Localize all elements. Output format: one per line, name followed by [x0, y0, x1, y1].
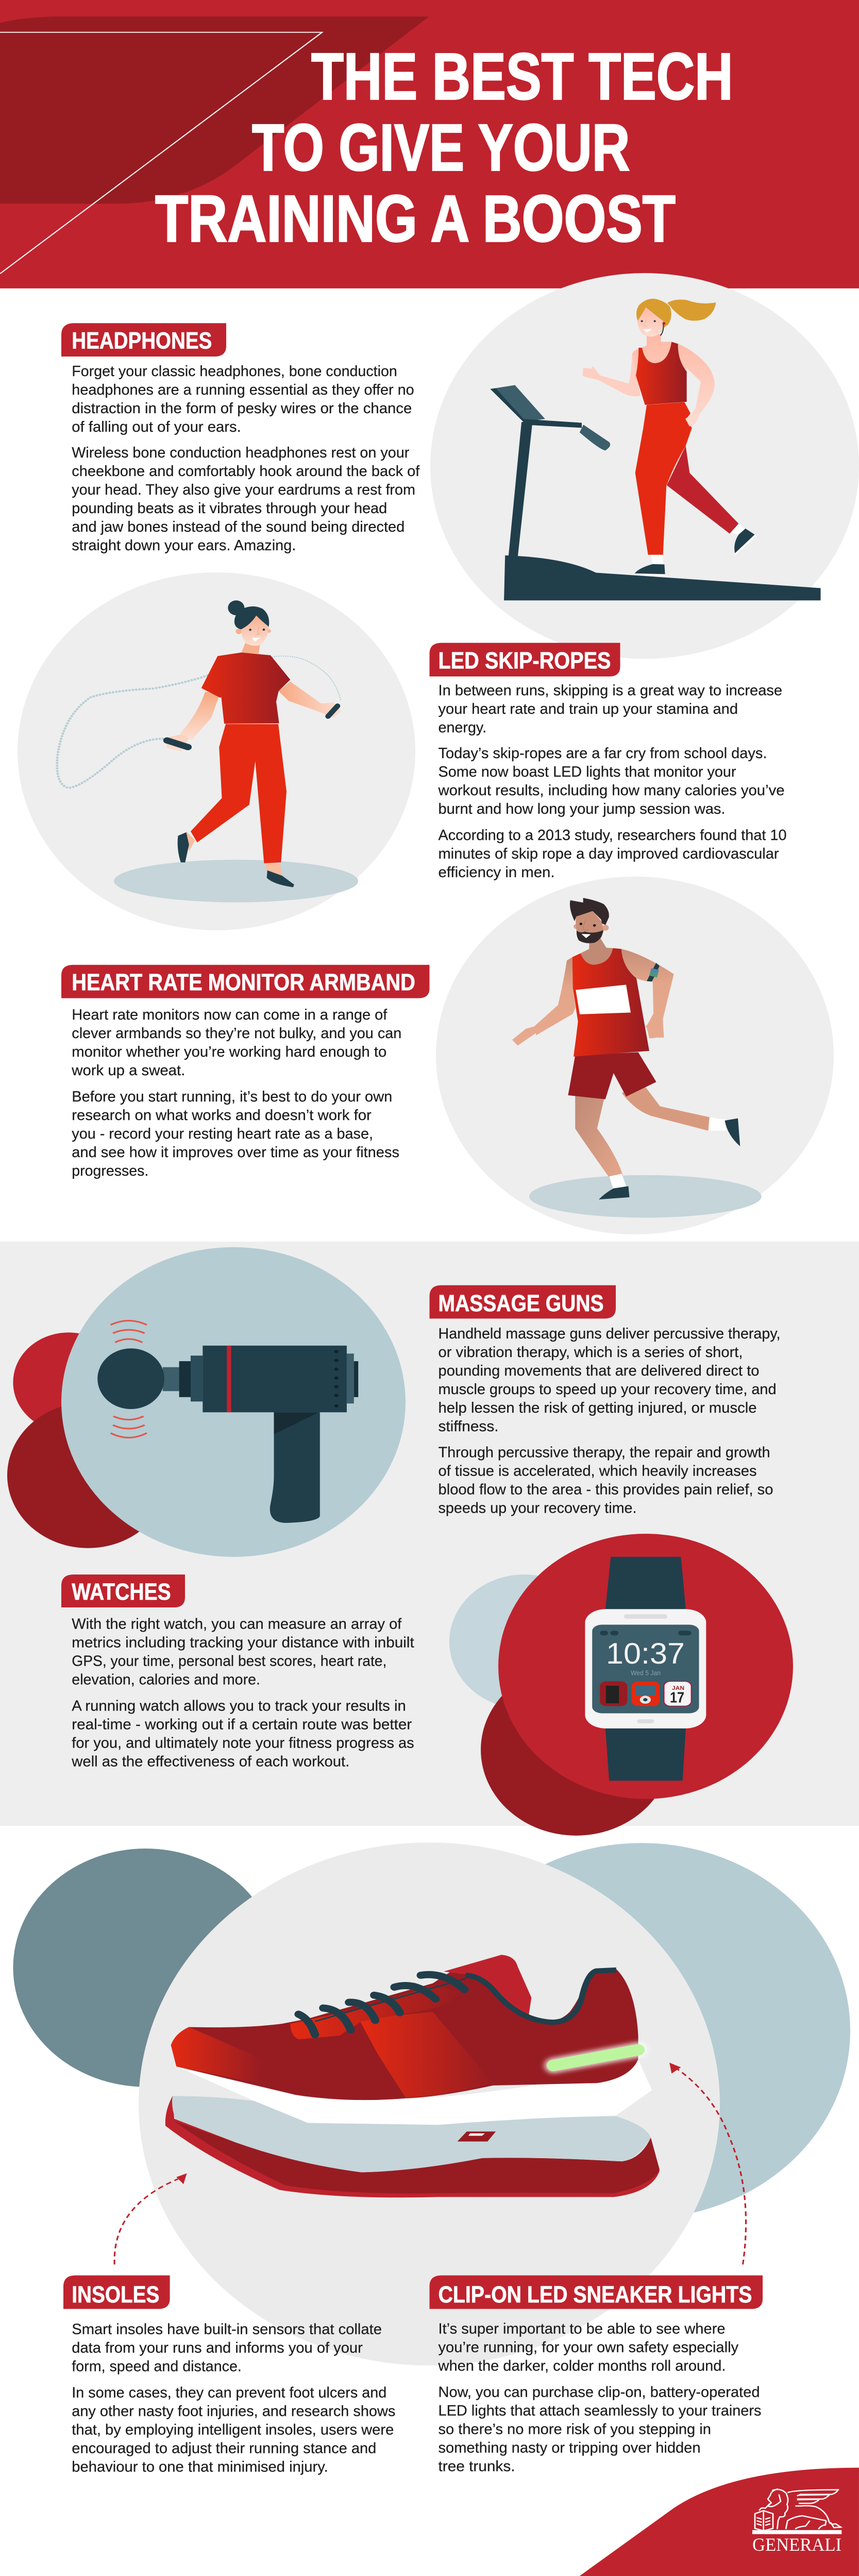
- text: skip-ropes body: burnt and how long your jump session was.: [438, 801, 726, 817]
- text: insoles body: form, speed and distance.: [72, 2359, 242, 2375]
- text: watches body: well as the effectiveness of each workout.: [71, 1754, 349, 1770]
- text: armband body: progresses.: [72, 1163, 148, 1179]
- heading: headphones: [61, 323, 226, 357]
- title: TRAINING A BOOST: [155, 182, 676, 256]
- panel: watches: [61, 1534, 793, 1836]
- text: clip-on lights body: you’re running, for your own safety especially: [438, 2340, 738, 2355]
- illustration: sneaker and insole: [13, 1842, 850, 2365]
- text: headphones body: and jaw bones instead of the sound being directed: [72, 519, 405, 535]
- arrow to LED light: [669, 2063, 746, 2264]
- text: massage guns body: of tissue is accelerated, which heavily increases: [438, 1463, 756, 1479]
- text: skip-ropes body: your heart rate and train up your stamina and: [438, 701, 738, 717]
- text: armband body: [71, 1007, 401, 1179]
- text: massage guns body: Handheld massage guns deliver percussive therapy,: [438, 1326, 781, 1342]
- text: headphones body: headphones are a running essential as they offer no: [72, 382, 414, 398]
- text: armband body: monitor whether you’re working hard enough to: [72, 1044, 386, 1060]
- heading: clip-on LED sneaker lights: CLIP-ON LED SNEAKER LIGHTS: [438, 2282, 752, 2308]
- text: armband body: you - record your resting heart rate as a base,: [72, 1126, 373, 1142]
- text: massage guns body: or vibration therapy, which is a series of short,: [438, 1344, 743, 1361]
- illustration: woman skipping: [18, 572, 415, 930]
- text: headphones body: Wireless bone conduction headphones rest on your: [72, 445, 409, 461]
- text: massage guns body: blood flow to the area - this provides pain relief, so: [438, 1482, 773, 1498]
- text: armband body: Heart rate monitors now can come in a range of: [72, 1007, 388, 1023]
- text: massage guns body: stiffness.: [438, 1418, 499, 1435]
- text: massage guns body: Through percussive therapy, the repair and growth: [438, 1445, 770, 1461]
- heading: LED skip-ropes: [430, 643, 620, 676]
- text: watches body: [71, 1616, 414, 1770]
- text: armband body: research on what works and doesn’t work for: [72, 1108, 372, 1124]
- text: skip-ropes body: In between runs, skipping is a great way to increase: [438, 683, 782, 699]
- illustration: massage gun: [7, 1247, 406, 1557]
- panel: LED skip-ropes: [18, 572, 786, 930]
- text: skip-ropes body: Today’s skip-ropes are a far cry from school days.: [438, 745, 767, 761]
- text: clip-on lights body: Now, you can purchase clip-on, battery-operated: [438, 2384, 760, 2400]
- text: clip-on lights body: tree trunks.: [438, 2459, 515, 2475]
- grey background band: [0, 1242, 859, 1826]
- calendar month label: JAN: [672, 1686, 684, 1691]
- text: insoles body: Smart insoles have built-in sensors that collate: [72, 2321, 382, 2337]
- watch time label: 10:37: [606, 1637, 685, 1670]
- text: watches body: GPS, your time, personal best scores, heart rate,: [72, 1653, 386, 1669]
- heading: heart rate monitor armband: [61, 965, 430, 998]
- text: headphones body: cheekbone and comfortably hook around the back of: [72, 464, 420, 480]
- text: clip-on lights body: so there’s no more risk of you stepping in: [438, 2421, 711, 2437]
- heading: clip-on LED sneaker lights: [430, 2275, 763, 2309]
- logo lion and book mark: [752, 2489, 841, 2534]
- logo wordmark: GENERALI: [752, 2535, 841, 2555]
- text: headphones body: [72, 363, 420, 554]
- panel: insoles: [63, 2275, 395, 2475]
- text: clip-on lights body: It’s super important to be able to see where: [438, 2321, 726, 2337]
- text: skip-ropes body: minutes of skip rope a day improved cardiovascular: [438, 846, 779, 862]
- white outline chevron: [0, 32, 322, 274]
- text: clip-on lights body: when the darker, colder months roll around.: [438, 2358, 726, 2374]
- text: skip-ropes body: efficiency in men.: [438, 865, 555, 880]
- illustration: woman running on treadmill: [430, 273, 859, 659]
- calendar day label: 17: [670, 1689, 684, 1706]
- heading: insoles: [63, 2275, 170, 2309]
- heading: headphones: HEADPHONES: [72, 328, 212, 354]
- title: TO GIVE YOUR: [252, 111, 630, 184]
- text: skip-ropes body: workout results, including how many calories you’ve: [438, 783, 785, 799]
- text: headphones body: of falling out of your ears.: [72, 419, 241, 435]
- text: skip-ropes body: [438, 683, 786, 880]
- text: watches body: real-time - working out if a certain route was better: [72, 1717, 412, 1733]
- text: massage guns body: [438, 1326, 780, 1516]
- illustration: man running with armband: [436, 876, 834, 1234]
- watch date label: Wed 5 Jan: [631, 1669, 661, 1676]
- panel: heart rate monitor armband: [61, 876, 834, 1234]
- text: watches body: elevation, calories and more.: [72, 1672, 260, 1688]
- heading: LED skip-ropes: LED SKIP-ROPES: [438, 648, 611, 674]
- dark red chevron shape: [0, 16, 429, 204]
- text: watches body: metrics including tracking your distance with inbuilt: [72, 1635, 414, 1651]
- text: insoles body: data from your runs and informs you of your: [72, 2340, 363, 2356]
- text: insoles body: behaviour to one that minimised injury.: [72, 2459, 328, 2475]
- text: headphones body: straight down your ears. Amazing.: [72, 538, 296, 554]
- text: massage guns body: pounding movements that are delivered direct to: [438, 1363, 760, 1379]
- text: clip-on lights body: LED lights that attach seamlessly to your trainers: [438, 2403, 761, 2419]
- arrow to insole: [114, 2173, 187, 2264]
- text: massage guns body: help lessen the risk of getting injured, or muscle: [438, 1400, 756, 1416]
- text: insoles body: any other nasty foot injuries, and research shows: [72, 2403, 395, 2419]
- heading: massage guns: MASSAGE GUNS: [438, 1291, 604, 1316]
- sneaker: [171, 1955, 652, 2125]
- footer corner with Generali logo: [580, 2468, 859, 2576]
- insole: [165, 2096, 660, 2197]
- text: watches body: With the right watch, you can measure an array of: [72, 1616, 402, 1632]
- panel: massage guns: [7, 1247, 780, 1557]
- text: insoles body: that, by employing intelligent insoles, users were: [72, 2422, 394, 2438]
- text: watches body: for you, and ultimately note your fitness progress as: [72, 1735, 414, 1751]
- text: armband body: clever armbands so they’re not bulky, and you can: [72, 1025, 401, 1042]
- panel: headphones: [61, 273, 859, 659]
- text: watches body: A running watch allows you to track your results in: [72, 1698, 406, 1714]
- heading: watches: [61, 1574, 185, 1607]
- text: headphones body: pounding beats as it vibrates through your head: [72, 501, 387, 517]
- text: headphones body: your head. They also give your eardrums a rest from: [72, 482, 415, 498]
- text: armband body: work up a sweat.: [71, 1062, 185, 1079]
- text: headphones body: distraction in the form of pesky wires or the chance: [72, 400, 412, 416]
- text: insoles body: encouraged to adjust their running stance and: [72, 2441, 376, 2456]
- text: massage guns body: speeds up your recovery time.: [438, 1500, 637, 1516]
- heading: heart rate monitor armband: HEART RATE MONITOR ARMBAND: [72, 970, 415, 995]
- heading: insoles: INSOLES: [72, 2282, 159, 2308]
- title: [155, 40, 733, 256]
- heading: watches: WATCHES: [72, 1579, 171, 1605]
- text: skip-ropes body: Some now boast LED lights that monitor your: [438, 764, 736, 780]
- text: insoles body: In some cases, they can prevent foot ulcers and: [72, 2385, 386, 2401]
- text: skip-ropes body: According to a 2013 study, researchers found that 10: [438, 827, 786, 843]
- text: massage guns body: muscle groups to speed up your recovery time, and: [438, 1381, 776, 1398]
- illustration: smart watch: [449, 1534, 793, 1836]
- header banner: [0, 0, 859, 289]
- panel: clip-on LED sneaker lights: [430, 2275, 763, 2475]
- text: skip-ropes body: energy.: [438, 720, 486, 736]
- text: clip-on lights body: something nasty or tripping over hidden: [438, 2440, 700, 2456]
- text: clip-on lights body: [438, 2321, 762, 2475]
- heading: massage guns: [430, 1285, 616, 1318]
- text: armband body: and see how it improves over time as your fitness: [72, 1145, 399, 1161]
- text: insoles body: [72, 2321, 395, 2475]
- text: headphones body: Forget your classic headphones, bone conduction: [72, 363, 397, 379]
- text: armband body: Before you start running, it’s best to do your own: [72, 1089, 392, 1105]
